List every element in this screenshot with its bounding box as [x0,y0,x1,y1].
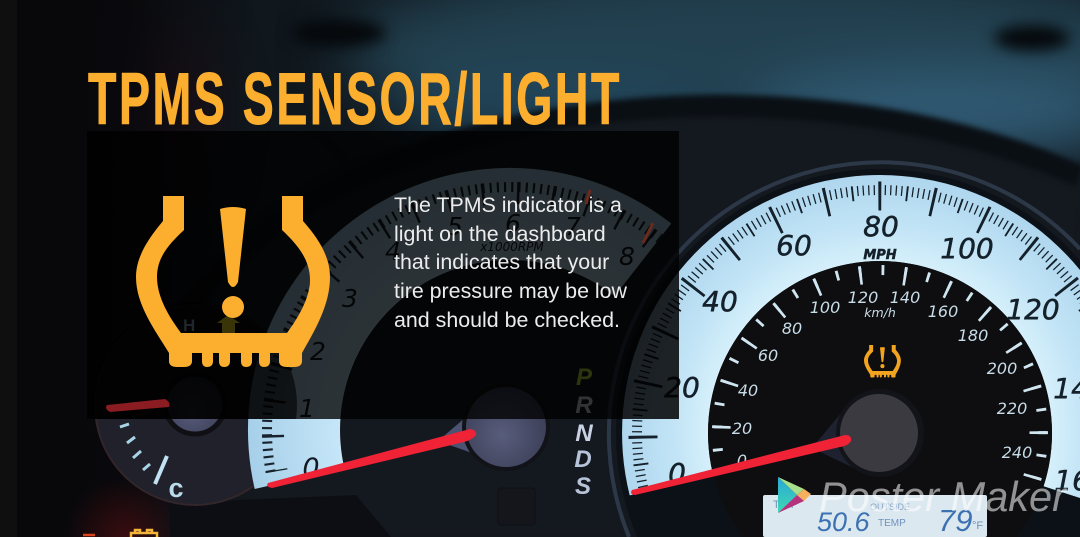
icon: large tire pressure warning light [136,196,330,367]
panel: dark overlay [87,131,679,419]
LCD display: TEMP [878,518,906,529]
description text: light on the dashboard [394,222,606,246]
title: TPMS SENSOR/LIGHT [88,59,622,140]
mph scale numbers [664,210,1080,497]
km/h scale numbers: 220 [997,399,1027,418]
speedometer ring dimmed behind panel [622,272,679,419]
km/h scale numbers: 80 [782,319,802,338]
LCD display: 79 [938,503,972,537]
mph scale numbers: 80 [863,210,899,243]
tachometer dial: 3 [342,284,358,313]
tachometer hub [438,383,550,471]
mph scale numbers: 120 [1006,293,1060,326]
km/h scale numbers: 160 [928,302,958,321]
temperature gauge dimmed behind panel [168,332,297,419]
tachometer needle [267,429,476,488]
km/h scale numbers [732,288,1032,470]
km/h scale numbers: 60 [758,346,778,365]
km/h scale numbers: 0 [737,451,747,470]
temperature gauge: c [168,473,184,503]
dim needle seen through panel [106,399,170,412]
tachometer dial: 4 [385,237,401,266]
tachometer dial: x1000RPM [479,240,544,254]
km/h scale numbers: 240 [1002,443,1032,462]
temperature gauge [95,305,295,505]
gear selector: P [576,364,593,391]
LCD display: TRIP [773,499,798,511]
dim red zone ticks seen through panel [586,190,653,243]
dim indicator seen through panel: H [183,316,195,335]
tachometer dial: 8 [619,242,635,271]
LCD display: °F [972,520,983,532]
icon: small tire pressure warning light [864,345,901,377]
description text: The TPMS indicator is a [394,193,622,217]
gear selector: D [574,446,592,473]
description text: that indicates that your [394,250,609,274]
mph scale numbers: 0 [668,457,686,490]
mph scale numbers: 100 [940,232,994,265]
km/h scale numbers: 20 [732,419,752,438]
mph scale numbers: 40 [702,285,738,318]
tachometer dial: 1 [299,394,315,423]
description text: and should be checked. [394,308,620,332]
km/h scale numbers: 180 [958,326,988,345]
LCD display: 50.6 [817,507,871,537]
LCD display: OUTSIDE [870,502,910,512]
speedometer dial [616,169,1080,537]
mph scale numbers: 20 [664,371,700,404]
km/h scale numbers: 120 [848,288,878,307]
gear selector [574,364,593,500]
description text [394,193,628,332]
dashboard warning lights [83,530,157,537]
tachometer dial: 7 [565,212,581,241]
km/h scale numbers: 40 [738,381,758,400]
gear selector: N [575,420,593,447]
icon: play logo [778,477,811,513]
tachometer dial: 0 [302,453,320,484]
tachometer dial: 2 [310,337,326,366]
tachometer dial [248,168,671,489]
watermark: Poster Maker: Poster Maker [819,473,1068,520]
tachometer dial: 6 [505,209,521,238]
mph scale numbers: MPH [863,248,897,263]
mph scale numbers: 60 [776,229,812,262]
speedometer hub [812,389,924,477]
speedometer needle [631,435,851,495]
gear selector: S [575,473,591,500]
description text: tire pressure may be low [394,279,628,303]
km/h scale numbers: 200 [987,359,1017,378]
LCD display [763,495,987,537]
tachometer dial: 5 [447,212,463,241]
km/h scale numbers: 100 [810,298,840,317]
km/h scale numbers: km/h [864,305,896,320]
speedometer bezel [609,162,1080,537]
gear selector: R [575,392,593,419]
km/h scale numbers: 140 [890,288,920,307]
dim indicator seen through panel [183,315,240,335]
